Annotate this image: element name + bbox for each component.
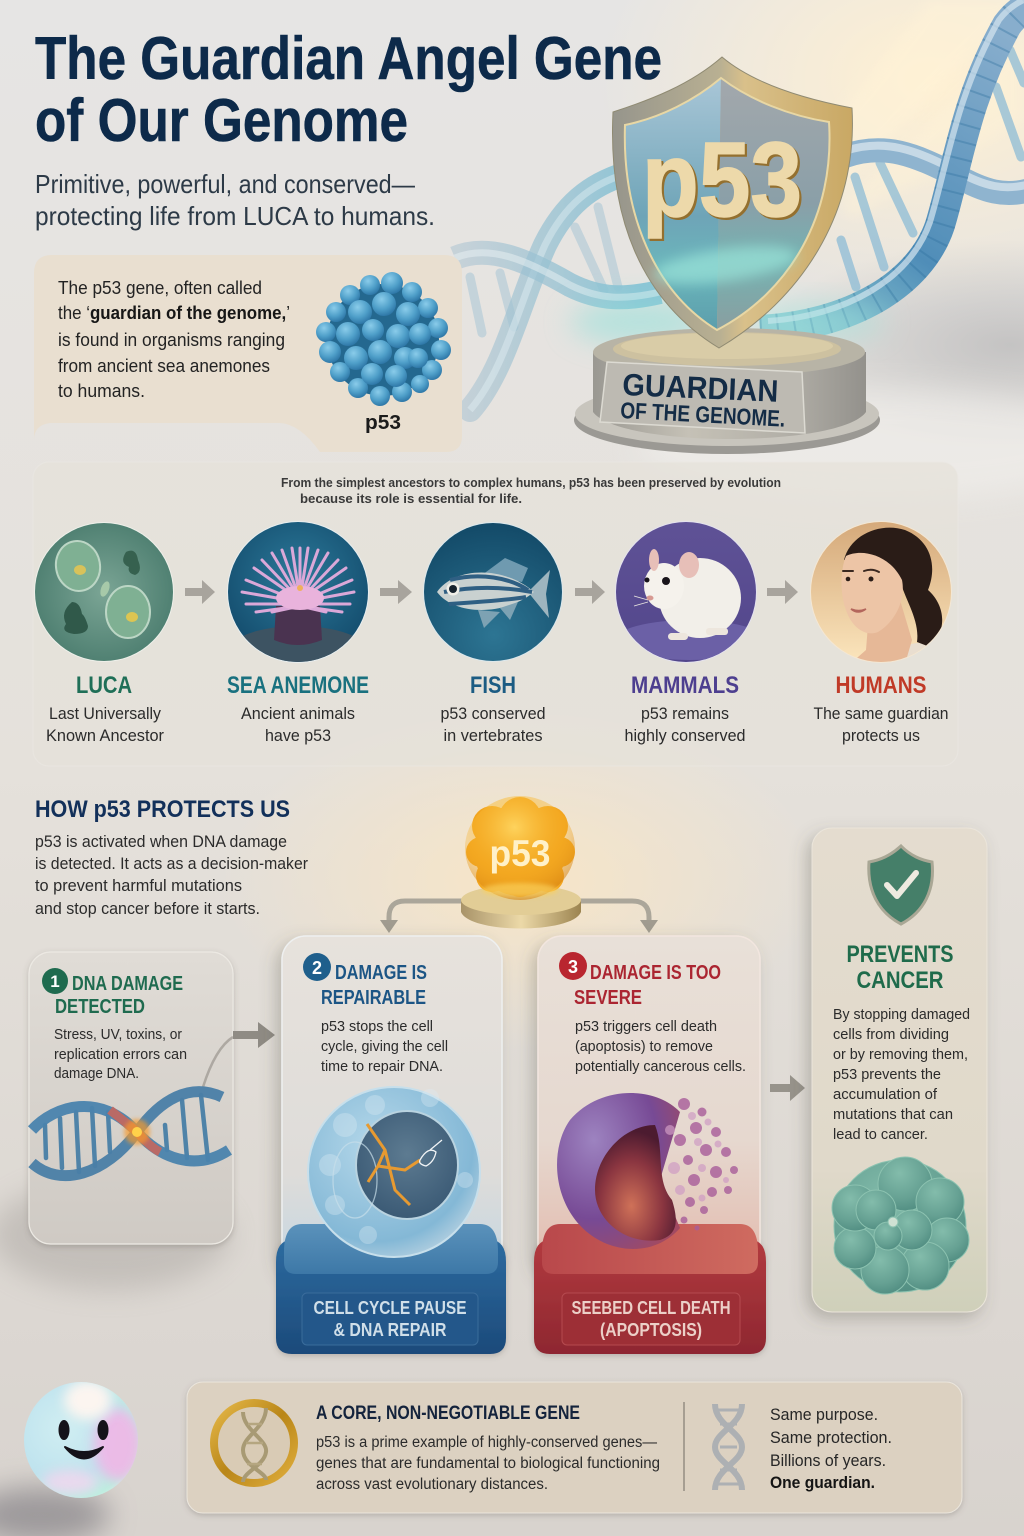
card 1 text: replication errors can bbox=[54, 1047, 187, 1063]
section intro text bbox=[35, 833, 308, 918]
number badge 2 bbox=[303, 953, 331, 981]
nameplate: OF THE GENOME. bbox=[620, 397, 786, 432]
title: The Guardian Angel Gene bbox=[35, 25, 662, 92]
number badge 2: 2 bbox=[312, 958, 322, 978]
panel: intro bbox=[34, 255, 462, 452]
base label: & DNA REPAIR bbox=[334, 1320, 446, 1340]
lineage labels: SEA ANEMONE bbox=[227, 672, 369, 699]
icon: p53 protein bbox=[316, 272, 451, 406]
p53 label: p53 bbox=[365, 412, 401, 434]
panel: core non-negotiable gene bbox=[187, 1382, 962, 1513]
nameplate: GUARDIAN bbox=[622, 367, 779, 409]
closing lines: Billions of years. bbox=[770, 1452, 886, 1470]
card 3: damage is too severe bbox=[534, 936, 766, 1354]
illustration: healthy cell cluster bbox=[832, 1157, 969, 1294]
nameplate bbox=[600, 362, 805, 433]
illustration: cell under repair bbox=[308, 1087, 480, 1257]
card 3 heading: DAMAGE IS TOO bbox=[590, 962, 721, 984]
lineage descriptions: Ancient animals bbox=[241, 704, 355, 723]
intro text: to humans. bbox=[58, 381, 145, 401]
lineage intro text: because its role is essential for life. bbox=[300, 491, 522, 506]
prevents cancer text: accumulation of bbox=[833, 1087, 938, 1103]
core heading: A CORE, NON-NEGOTIABLE GENE bbox=[316, 1403, 580, 1424]
arrow: card 1 to card 2 bbox=[233, 1022, 275, 1048]
prevents cancer text bbox=[833, 1007, 970, 1143]
icon: shield with check bbox=[869, 846, 932, 924]
lineage descriptions: p53 remains bbox=[641, 704, 729, 723]
pedestal bbox=[574, 328, 880, 454]
card 3 text: potentially cancerous cells. bbox=[575, 1059, 746, 1075]
orange p53 molecule: p53 bbox=[490, 833, 550, 874]
intro text bbox=[58, 278, 290, 401]
number badge 1: 1 bbox=[50, 972, 60, 991]
icon: gold DNA medallion bbox=[214, 1403, 294, 1483]
card 2 text: time to repair DNA. bbox=[321, 1059, 443, 1075]
lineage descriptions: protects us bbox=[842, 726, 920, 745]
background DNA helix bbox=[455, 0, 1024, 410]
card 2 heading: REPAIRABLE bbox=[321, 987, 426, 1009]
lineage labels bbox=[76, 672, 926, 699]
lineage labels: HUMANS bbox=[836, 672, 926, 699]
icon: grey DNA bbox=[715, 1404, 742, 1490]
subtitle: protecting life from LUCA to humans. bbox=[35, 201, 435, 231]
node: mammals bbox=[615, 521, 765, 663]
subtitle bbox=[35, 169, 435, 231]
node: sea anemone bbox=[227, 521, 369, 678]
prevents cancer heading: CANCER bbox=[856, 967, 944, 994]
icon: damaged DNA bbox=[32, 1037, 233, 1176]
p53 emblem: p53 bbox=[644, 123, 804, 241]
card 1 heading: DNA DAMAGE bbox=[72, 973, 183, 995]
node: LUCA bbox=[34, 522, 174, 662]
lineage descriptions: in vertebrates bbox=[444, 726, 542, 745]
card 1 heading bbox=[55, 973, 183, 1018]
gold pedestal bbox=[461, 885, 581, 928]
lineage intro text bbox=[281, 475, 781, 506]
intro text: from ancient sea anemones bbox=[58, 356, 270, 376]
red base bbox=[534, 1224, 766, 1354]
illustration: cell undergoing apoptosis bbox=[557, 1093, 738, 1249]
number badge 1 bbox=[42, 968, 68, 994]
lineage descriptions: highly conserved bbox=[624, 726, 746, 745]
p53 decision hub bbox=[380, 796, 658, 933]
intro text: the ‘guardian of the genome,’ bbox=[58, 303, 290, 323]
closing lines: Same protection. bbox=[770, 1429, 892, 1447]
card 2 text: p53 stops the cell bbox=[321, 1019, 433, 1035]
card 2: damage is repairable bbox=[276, 936, 506, 1354]
card 2 text: cycle, giving the cell bbox=[321, 1039, 448, 1055]
prevents cancer text: or by removing them, bbox=[833, 1047, 968, 1063]
card 2 heading bbox=[321, 962, 427, 1009]
core text: p53 is a prime example of highly-conserved genes— bbox=[316, 1434, 657, 1451]
prevents cancer text: lead to cancer. bbox=[833, 1127, 928, 1143]
panel: prevents cancer bbox=[812, 828, 987, 1312]
base label bbox=[562, 1293, 740, 1345]
title: of Our Genome bbox=[35, 87, 408, 154]
closing lines: One guardian. bbox=[770, 1474, 875, 1492]
prevents cancer text: By stopping damaged bbox=[833, 1007, 970, 1023]
base label: SEEBED CELL DEATH bbox=[572, 1298, 730, 1318]
card 2 text bbox=[321, 1019, 448, 1075]
shield bbox=[612, 57, 852, 348]
title bbox=[35, 25, 662, 154]
lineage labels: FISH bbox=[470, 672, 516, 699]
prevents cancer heading: PREVENTS bbox=[846, 941, 954, 968]
prevents cancer text: p53 prevents the bbox=[833, 1067, 941, 1083]
base label: CELL CYCLE PAUSE bbox=[314, 1298, 466, 1318]
section intro text: and stop cancer before it starts. bbox=[35, 900, 260, 918]
lineage labels: LUCA bbox=[76, 672, 132, 699]
number badge 3: 3 bbox=[568, 957, 578, 977]
card 2 heading: DAMAGE IS bbox=[335, 962, 427, 984]
section intro text: p53 is activated when DNA damage bbox=[35, 833, 287, 851]
prevents cancer text: cells from dividing bbox=[833, 1027, 949, 1043]
card 1: DNA damage detected bbox=[29, 952, 233, 1244]
subtitle: Primitive, powerful, and conserved— bbox=[35, 169, 415, 199]
lineage descriptions: The same guardian bbox=[814, 704, 948, 723]
base label: (APOPTOSIS) bbox=[600, 1320, 702, 1340]
prevents cancer text: mutations that can bbox=[833, 1107, 953, 1123]
card 3 heading bbox=[574, 962, 721, 1009]
base label bbox=[302, 1293, 478, 1345]
intro text: is found in organisms ranging bbox=[58, 330, 285, 350]
branch arrows bbox=[380, 901, 658, 933]
arrow: card 3 to prevents cancer bbox=[770, 1075, 805, 1101]
orange p53 molecule bbox=[465, 796, 575, 900]
number badge 3 bbox=[559, 952, 587, 980]
p53 emblem: p53 bbox=[642, 121, 802, 239]
panel: evolutionary lineage bbox=[33, 462, 958, 766]
section heading: how p53 protects us: HOW p53 PROTECTS US bbox=[35, 796, 290, 823]
lineage descriptions: Known Ancestor bbox=[46, 726, 164, 745]
core text: across vast evolutionary distances. bbox=[316, 1476, 548, 1493]
card 1 text: Stress, UV, toxins, or bbox=[54, 1027, 182, 1043]
intro text: The p53 gene, often called bbox=[58, 278, 262, 298]
lineage labels: MAMMALS bbox=[631, 672, 739, 699]
card 1 text bbox=[54, 1027, 187, 1082]
node: fish bbox=[423, 522, 564, 663]
card 1 heading: DETECTED bbox=[55, 996, 145, 1018]
arrows between lineage nodes bbox=[185, 580, 798, 604]
card 3 text: (apoptosis) to remove bbox=[575, 1039, 713, 1055]
card 3 heading: SEVERE bbox=[574, 987, 642, 1009]
prevents cancer heading bbox=[846, 941, 954, 994]
lineage descriptions: p53 conserved bbox=[440, 704, 546, 723]
lineage descriptions: Last Universally bbox=[49, 704, 161, 723]
card 3 text: p53 triggers cell death bbox=[575, 1019, 717, 1035]
section intro text: to prevent harmful mutations bbox=[35, 877, 242, 895]
closing lines: Same purpose. bbox=[770, 1406, 878, 1424]
lineage intro text: From the simplest ancestors to complex humans, p53 has been preserved by evolution bbox=[281, 475, 781, 490]
lineage descriptions: have p53 bbox=[265, 726, 331, 745]
closing lines bbox=[770, 1406, 892, 1492]
trophy: p53 shield on pedestal bbox=[574, 57, 880, 454]
core text: genes that are fundamental to biological functioning bbox=[316, 1455, 660, 1472]
lineage descriptions bbox=[46, 704, 948, 745]
node: humans bbox=[810, 521, 952, 664]
section intro text: is detected. It acts as a decision-maker bbox=[35, 855, 308, 873]
card 3 text bbox=[575, 1019, 746, 1075]
mascot: smiling bubble bbox=[24, 1380, 142, 1498]
card 1 text: damage DNA. bbox=[54, 1066, 139, 1082]
blue base bbox=[276, 1224, 506, 1354]
core text bbox=[316, 1434, 660, 1493]
